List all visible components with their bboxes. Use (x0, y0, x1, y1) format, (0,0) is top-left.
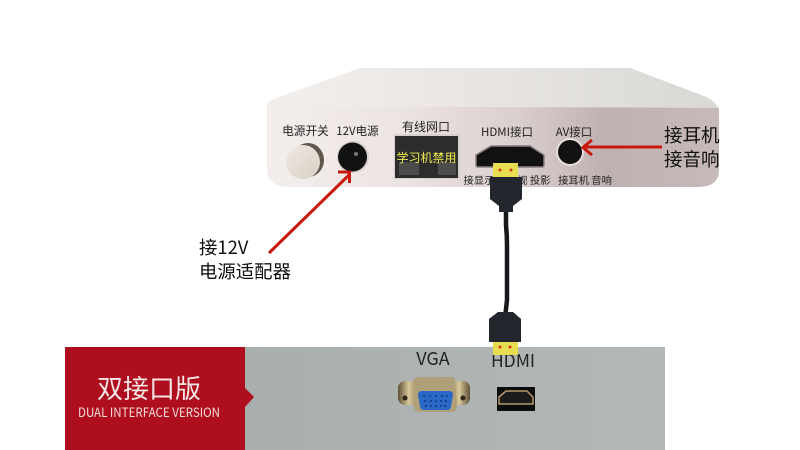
cable: HDMI cable (489, 163, 522, 355)
device front face (267, 107, 719, 187)
callout: AV port usage: 接音响 (664, 146, 720, 172)
icon: HDMI port (476, 146, 544, 167)
device: set-top box (267, 68, 719, 187)
subheading: DUAL INTERFACE VERSION (78, 402, 220, 421)
callout: power adapter: 电源适配器 (199, 258, 291, 284)
arrow: to AV port (583, 140, 662, 155)
label: VGA: VGA (416, 345, 450, 371)
icon: power switch knob (286, 143, 324, 179)
device top face (267, 68, 719, 110)
label: network port: 有线网口 (402, 118, 450, 135)
notice text: 学习机禁用 (396, 149, 457, 166)
label: 12V power: 12V电源 (336, 123, 379, 139)
icon: HDMI socket (497, 387, 535, 411)
label: AV port: AV接口 (556, 124, 592, 140)
banner: interface panel (240, 347, 665, 450)
callout: power adapter (199, 234, 291, 284)
icon: VGA connector (398, 377, 470, 412)
icon: 12V power socket (337, 141, 369, 173)
label: HDMI: HDMI (491, 348, 535, 373)
label: HDMI usage: 接显示器 电视 投影 (464, 172, 550, 187)
label: AV usage: 接耳机 音响 (558, 172, 612, 187)
lower HDMI plug (489, 312, 521, 355)
label: HDMI port: HDMI接口 (481, 124, 533, 140)
label: power switch: 电源开关 (282, 122, 329, 139)
callout: AV port usage: 接耳机 (664, 122, 720, 148)
upper HDMI plug (490, 163, 522, 212)
arrow: to power socket (269, 172, 350, 253)
cable cord (505, 205, 507, 318)
heading: 双接口版 (97, 369, 201, 406)
icon: AV port (556, 138, 584, 166)
icon: network port with disabled notice (394, 134, 460, 179)
callout: power adapter: 接12V (199, 234, 249, 260)
panel: dual interface version (65, 347, 254, 450)
callout: AV port usage (664, 122, 720, 172)
